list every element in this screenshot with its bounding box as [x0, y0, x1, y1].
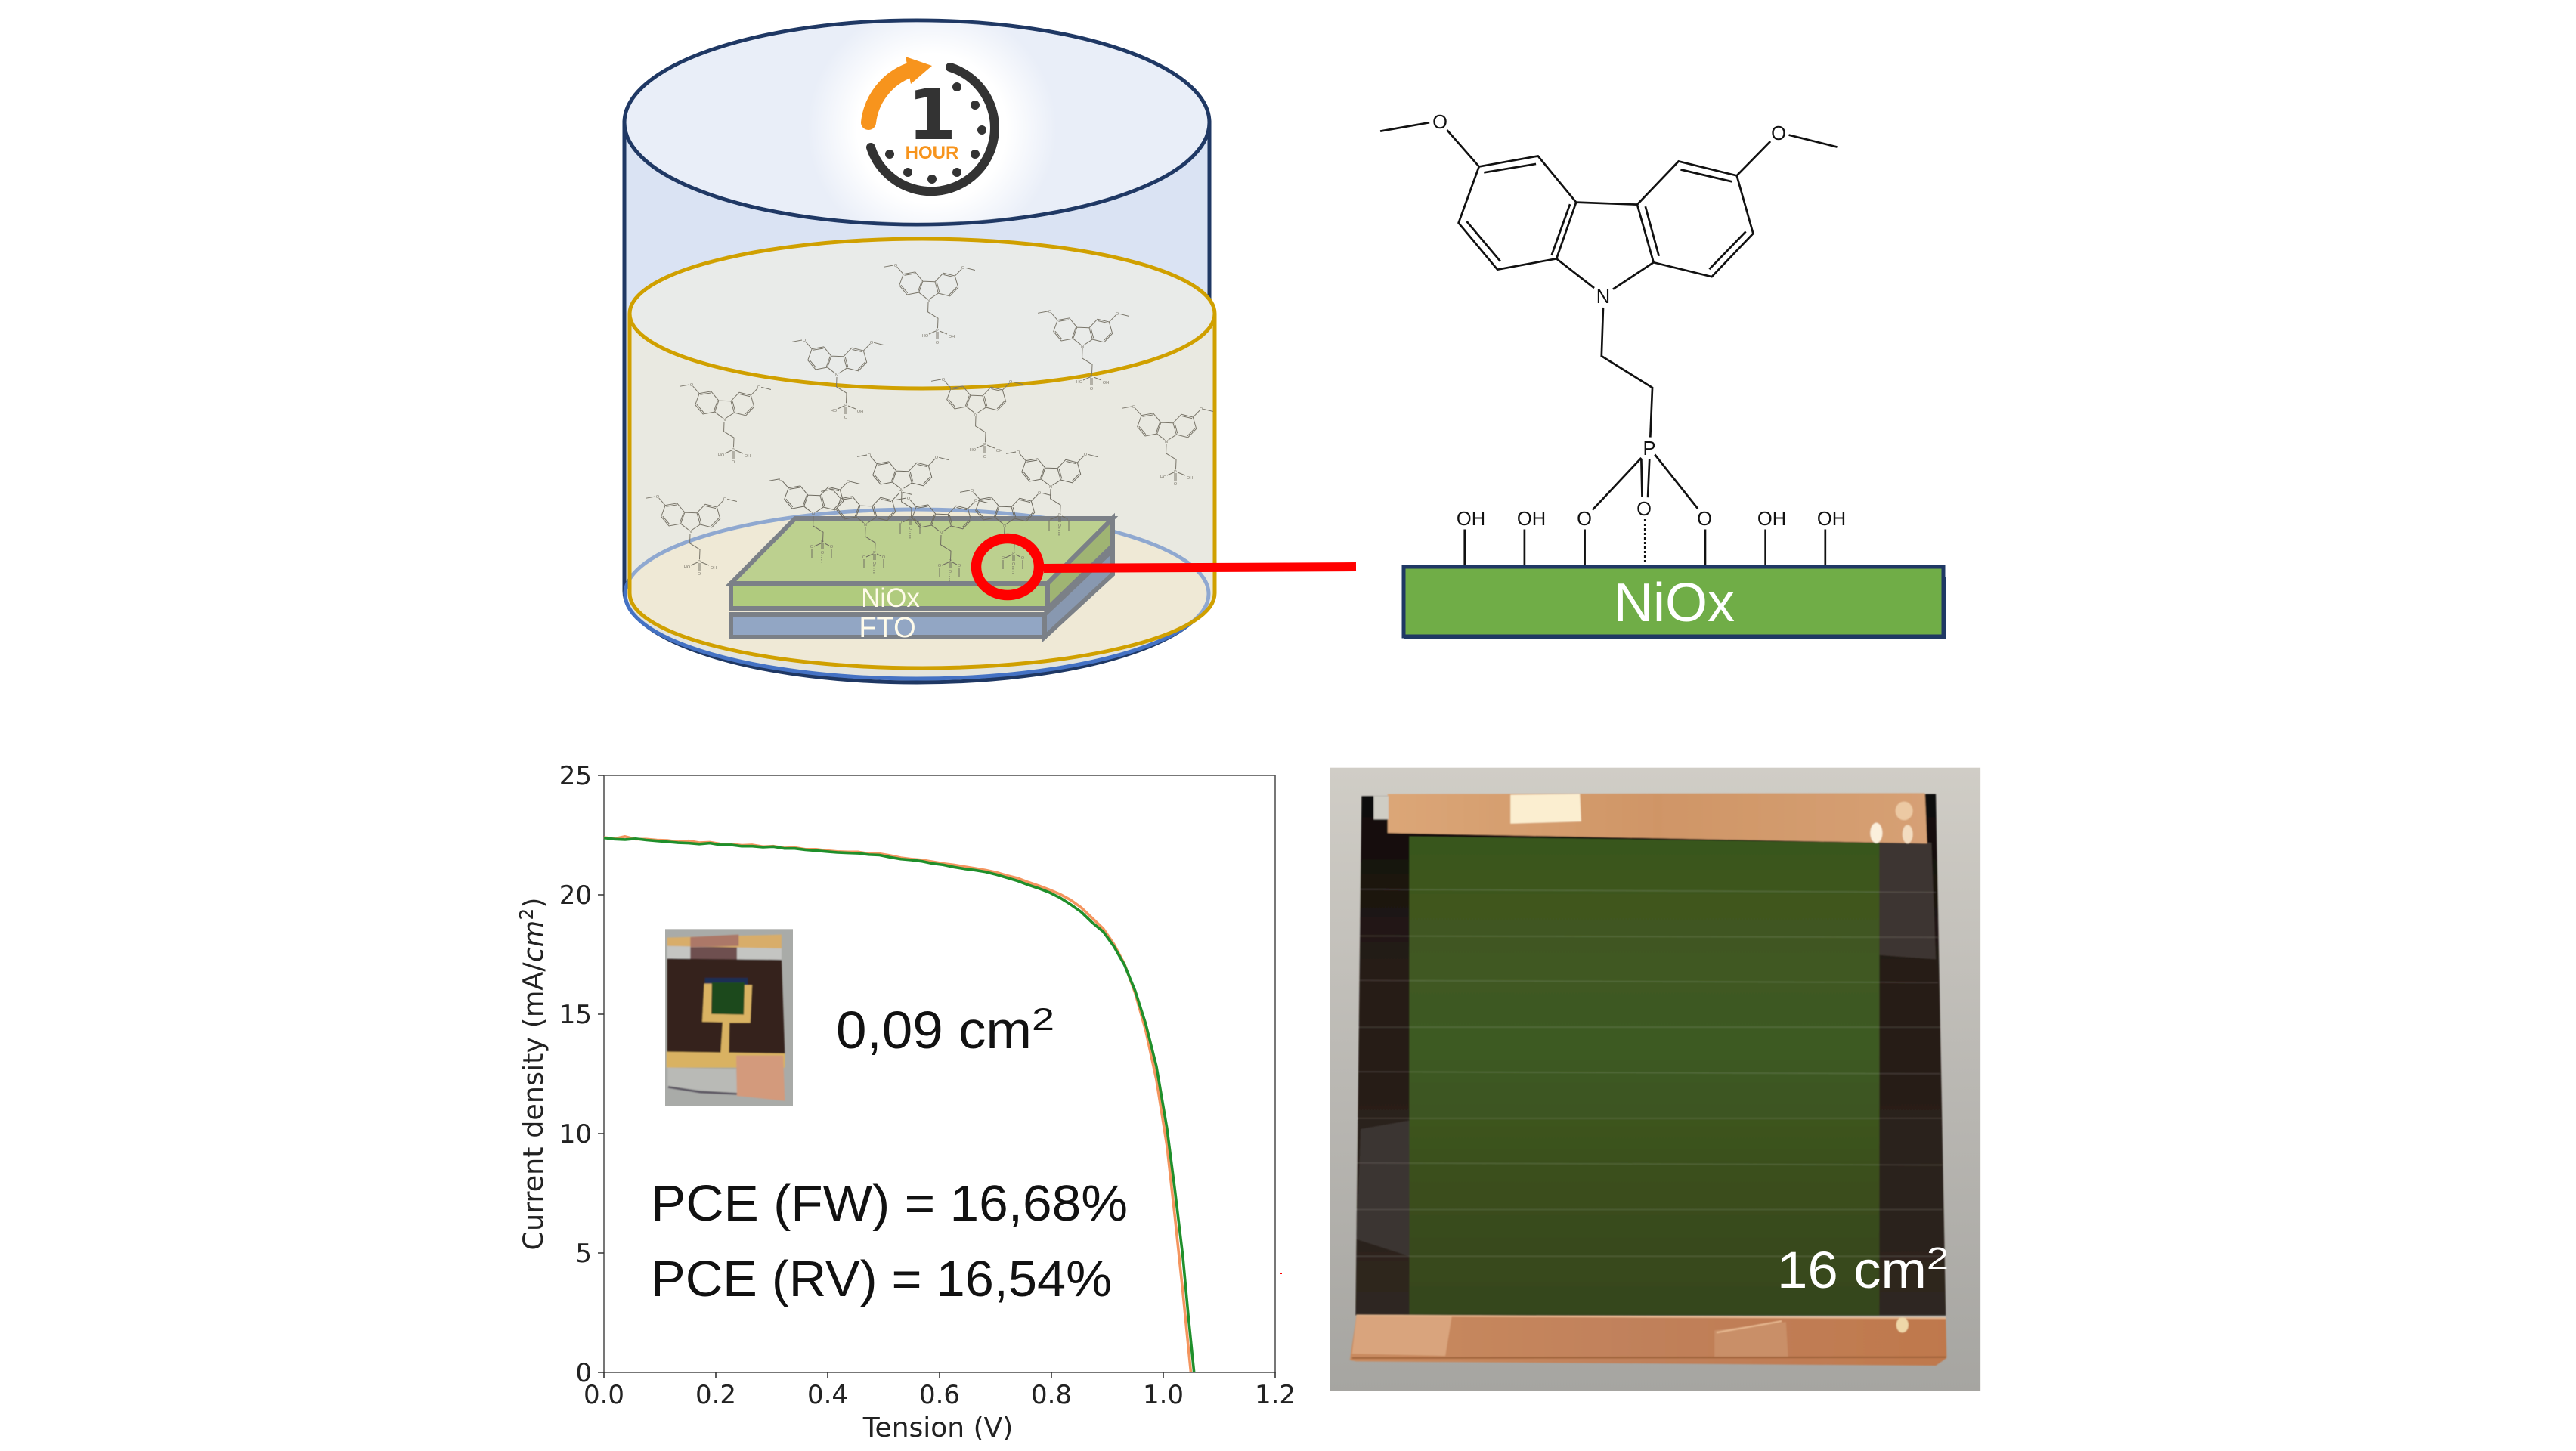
molecules dissolved in solution: O	[1090, 387, 1094, 391]
atom labels: OH	[1817, 509, 1846, 530]
molecules dissolved in solution: O	[698, 572, 701, 577]
label: device area: 0,09 cm	[836, 1001, 1032, 1060]
molecules anchored on the film: O	[1017, 450, 1020, 455]
molecules anchored on the film: O	[974, 499, 978, 503]
panel: molecule anchored on NiOx	[1380, 112, 1946, 639]
molecules dissolved in solution: O	[936, 341, 940, 345]
molecules dissolved in solution: N	[835, 373, 838, 378]
molecules dissolved in solution: O	[1174, 482, 1178, 487]
atom labels: O	[1432, 112, 1447, 133]
y axis title: )	[517, 898, 550, 908]
photo background	[1330, 768, 1980, 1391]
molecules anchored on the film: O	[909, 527, 913, 531]
molecules dissolved in solution: N	[974, 413, 977, 417]
skeletal formula	[1380, 122, 1838, 565]
molecules anchored on the film: O	[958, 564, 961, 568]
molecules dissolved in solution: O	[1048, 310, 1052, 314]
molecules anchored on the film: O	[907, 497, 911, 501]
molecules dissolved in solution: OH	[996, 449, 1002, 453]
reverse curve (orange)	[604, 837, 1190, 1372]
label: device area: 2	[1032, 1001, 1054, 1037]
molecules dissolved in solution: O	[942, 378, 946, 382]
molecules dissolved in solution: O	[870, 341, 874, 345]
molecules anchored on the film: O	[935, 456, 939, 460]
atom labels: O	[1577, 509, 1592, 530]
molecules dissolved in solution: HO	[970, 448, 977, 453]
molecules anchored on the film: O	[873, 562, 877, 566]
molecules dissolved in solution: O	[894, 264, 898, 268]
label: PCE reverse: PCE (RV) = 16,54%	[651, 1251, 1112, 1307]
bottom copper tape	[1350, 1316, 1946, 1366]
molecules anchored on the film: P	[1012, 552, 1015, 556]
atom labels: P	[1643, 438, 1656, 459]
beaker floor	[625, 509, 1209, 679]
molecules dissolved in solution: N	[1081, 345, 1084, 349]
molecules dissolved in solution: P	[936, 329, 939, 333]
x tick labels: 0.4	[807, 1380, 848, 1410]
tape highlight	[1352, 1316, 1452, 1356]
label: NiOx: NiOx	[1614, 573, 1735, 633]
icon: one hour clock	[868, 57, 995, 191]
atom labels: O	[1771, 123, 1786, 144]
molecules dissolved in solution: P	[1090, 375, 1093, 379]
molecules dissolved in solution: P	[983, 443, 986, 447]
molecules anchored on the film: O	[1021, 556, 1025, 561]
molecules dissolved in solution: O	[656, 495, 660, 500]
x tick labels: 0.8	[1031, 1380, 1072, 1410]
y tick labels: 0	[575, 1358, 592, 1388]
molecules dissolved in solution	[646, 264, 1213, 577]
beaker body	[624, 122, 1209, 682]
NiOx substrate bar	[1404, 567, 1943, 636]
molecules anchored on the film: O	[882, 555, 886, 560]
molecules dissolved in solution: HO	[684, 565, 691, 570]
axis ticks	[598, 775, 1275, 1378]
molecules anchored on the film: O	[938, 564, 942, 568]
liquid body	[630, 239, 1215, 668]
molecules anchored on the film: O	[1038, 491, 1042, 496]
liquid surface	[630, 239, 1215, 388]
tape highlight	[1510, 794, 1581, 824]
molecules anchored on the film: P	[909, 516, 912, 521]
y tick labels: 25	[559, 761, 592, 791]
scribe lines	[1356, 889, 1943, 1256]
molecules dissolved in solution: O	[844, 416, 848, 420]
top copper tape	[1388, 793, 1927, 843]
panel: J-V chart	[516, 761, 1296, 1443]
molecules dissolved in solution: N	[1165, 440, 1168, 444]
forward and reverse curves	[604, 837, 1194, 1372]
x tick labels: 1.0	[1143, 1380, 1184, 1410]
atom labels	[1432, 112, 1846, 530]
molecules anchored on the film: O	[1012, 562, 1016, 567]
atom labels: O	[1636, 499, 1652, 520]
x tick labels: 1.2	[1255, 1380, 1296, 1410]
liquid floor tint	[625, 509, 1209, 679]
molecules dissolved in solution: O	[803, 339, 807, 343]
label: module area: 2	[1927, 1241, 1949, 1276]
molecules dissolved in solution: HO	[1076, 380, 1083, 385]
y tick labels	[559, 761, 592, 1388]
y axis title: Current density (mA/cm	[517, 920, 550, 1250]
beaker lid	[624, 20, 1209, 224]
molecules dissolved in solution: O	[983, 455, 987, 459]
atom labels: OH	[1457, 509, 1485, 530]
molecules anchored on the film: N	[1003, 524, 1006, 528]
molecules anchored on the film: N	[812, 512, 815, 517]
photo: small 0.09 cm2 device	[665, 929, 793, 1106]
molecules dissolved in solution: P	[844, 404, 847, 408]
molecules dissolved in solution: O	[723, 497, 727, 502]
molecules dissolved in solution: HO	[831, 409, 838, 413]
molecules anchored on the film: N	[1049, 485, 1052, 490]
molecules anchored on the film: O	[868, 453, 872, 458]
molecules dissolved in solution: O	[732, 460, 735, 465]
molecules anchored on the film: O	[831, 488, 835, 493]
molecules dissolved in solution: N	[723, 418, 726, 422]
molecules dissolved in solution: OH	[1103, 381, 1109, 385]
molecules anchored on the film: O	[1002, 556, 1005, 561]
liquid outline	[630, 314, 1215, 668]
y tick labels: 15	[559, 1000, 592, 1030]
forward curve (green)	[604, 838, 1194, 1372]
y tick labels: 20	[559, 880, 592, 911]
x tick labels: 0.0	[584, 1380, 624, 1410]
molecules dissolved in solution: OH	[1187, 476, 1193, 481]
molecules anchored on the film: O	[971, 489, 974, 493]
callout: red magnifier circle and connector	[977, 538, 1356, 596]
molecules dissolved in solution: O	[1200, 407, 1203, 412]
molecules anchored on the film: P	[1058, 513, 1061, 518]
molecules dissolved in solution: P	[698, 560, 701, 565]
molecules dissolved in solution: O	[1132, 405, 1136, 410]
molecules dissolved in solution: HO	[922, 334, 929, 339]
molecules anchored on the film: N	[900, 488, 903, 493]
x tick labels: 0.6	[919, 1380, 960, 1410]
molecules anchored on the film: O	[1084, 453, 1088, 457]
molecules anchored on the film: O	[918, 521, 922, 525]
module glass	[1355, 794, 1946, 1316]
molecules anchored on the film: O	[899, 521, 903, 525]
panel: beaker with solution and substrate	[624, 4, 1215, 682]
y axis title: 2	[516, 908, 537, 920]
icon: one hour clock: HOUR	[906, 143, 958, 163]
molecules anchored on the film: O	[830, 545, 834, 549]
molecules dissolved in solution: P	[1174, 470, 1177, 475]
molecules anchored on the film	[769, 450, 1098, 583]
molecules anchored on the film: O	[862, 555, 866, 560]
molecules anchored on the film: O	[847, 480, 850, 484]
label: PCE forward: PCE (FW) = 16,68%	[651, 1175, 1128, 1232]
atom labels: O	[1697, 509, 1712, 530]
icon: one hour clock: 1	[908, 74, 956, 156]
molecules dissolved in solution: O	[1116, 312, 1119, 317]
molecules dissolved in solution: O	[757, 385, 761, 390]
molecules anchored on the film: O	[810, 545, 814, 549]
atom labels: N	[1596, 286, 1610, 308]
x tick labels	[584, 1380, 1296, 1410]
molecules dissolved in solution: O	[1009, 380, 1013, 385]
molecules dissolved in solution: N	[927, 299, 930, 303]
NiOx layer	[731, 518, 1113, 608]
molecules anchored on the film: N	[940, 531, 943, 536]
molecules anchored on the film: O	[1058, 524, 1062, 528]
atom labels: OH	[1757, 509, 1786, 530]
active green area	[1410, 837, 1879, 1316]
molecules dissolved in solution: OH	[949, 335, 955, 339]
molecules anchored on the film: P	[949, 559, 952, 564]
y tick labels: 10	[559, 1119, 592, 1149]
molecules dissolved in solution: P	[732, 448, 735, 453]
substrate: NiOx on FTO	[731, 518, 1113, 637]
molecules anchored on the film: P	[821, 540, 824, 545]
atom labels: OH	[1517, 509, 1546, 530]
label: FTO: FTO	[859, 612, 916, 644]
molecules anchored on the film: O	[899, 490, 903, 495]
molecules dissolved in solution: HO	[1160, 475, 1167, 480]
molecules anchored on the film: P	[873, 551, 876, 555]
x axis title: Tension (V)	[862, 1412, 1013, 1443]
bar shadow edge	[1404, 577, 1946, 639]
molecules anchored on the film: O	[779, 478, 783, 482]
molecules dissolved in solution: O	[690, 383, 694, 388]
molecules anchored on the film: O	[1048, 518, 1051, 522]
plot frame	[604, 775, 1275, 1372]
x tick labels: 0.2	[695, 1380, 736, 1410]
molecules anchored on the film: O	[821, 551, 825, 555]
molecules anchored on the film: N	[864, 523, 867, 527]
molecules dissolved in solution: OH	[745, 454, 751, 459]
molecules dissolved in solution: N	[689, 530, 692, 534]
molecules anchored on the film: O	[949, 570, 952, 574]
FTO layer	[731, 550, 1113, 637]
panel: photo of 16 cm2 module	[1330, 768, 1980, 1391]
lid glow behind clock	[827, 22, 1037, 223]
molecules dissolved in solution: OH	[711, 566, 717, 571]
molecules dissolved in solution: OH	[857, 410, 863, 414]
molecules dissolved in solution: O	[961, 266, 965, 271]
y tick labels: 5	[575, 1239, 592, 1269]
molecules anchored on the film: O	[1067, 518, 1071, 522]
stray red pixel	[1280, 1273, 1282, 1274]
label: module area: 16 cm	[1777, 1241, 1927, 1299]
molecules dissolved in solution: HO	[718, 453, 725, 458]
label: NiOx: NiOx	[861, 583, 920, 613]
